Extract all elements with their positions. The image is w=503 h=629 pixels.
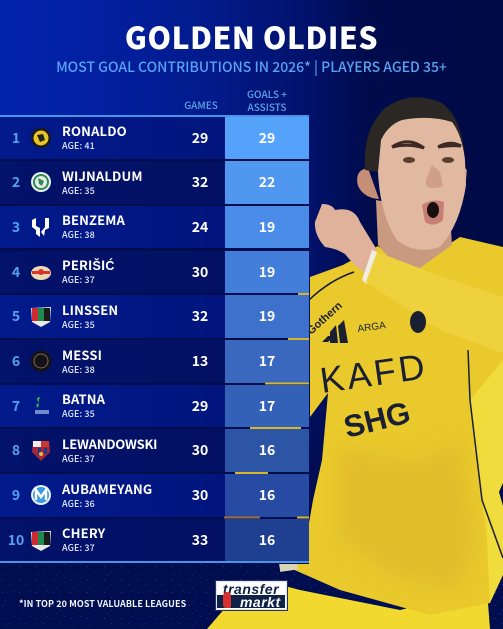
row 6: 13 <box>192 351 208 371</box>
table top rule <box>0 115 309 117</box>
fist and forearm <box>315 204 377 272</box>
row 1: 29 <box>192 128 208 148</box>
row 9: 16 <box>259 485 275 505</box>
row 7: BATNA <box>62 389 105 408</box>
row 4: AGE: 37 <box>62 273 95 286</box>
row 6 <box>0 340 309 382</box>
shoulder stripe <box>309 272 354 300</box>
torso <box>277 237 503 615</box>
logo: Barcelona <box>32 441 50 461</box>
transfermarkt logo <box>216 581 287 610</box>
row 4: 30 <box>192 262 208 282</box>
row 10 <box>0 519 309 561</box>
row 5: LINSSEN <box>62 300 118 319</box>
raised sleeve <box>366 252 503 353</box>
row 1: 29 <box>259 128 275 148</box>
row 8: 16 <box>259 440 275 460</box>
row 2: WIJNALDUM <box>62 166 143 185</box>
shirt shading <box>340 440 475 590</box>
row 3: 3 <box>12 217 20 237</box>
row 7: AGE: 35 <box>62 407 95 420</box>
row 10: 33 <box>192 530 208 550</box>
eyebrows <box>392 142 461 148</box>
column header: goals + assists: GOALS + <box>247 86 287 101</box>
shirt hem tag <box>279 560 298 572</box>
row 10: AGE: 37 <box>62 541 95 554</box>
row 9: AGE: 36 <box>62 497 95 510</box>
sponsor Sothern: Gothern <box>305 300 345 337</box>
row 4: 4 <box>12 262 20 282</box>
table <box>0 115 309 564</box>
logo: Al-Ettifaq <box>31 172 51 192</box>
row 9 <box>0 474 309 517</box>
row 5: AGE: 35 <box>62 318 95 331</box>
crest <box>410 311 426 333</box>
row 8: 30 <box>192 440 208 460</box>
sponsor KAFD: KAFD <box>317 345 430 401</box>
row 5: 5 <box>12 306 20 326</box>
logo: NEC <box>31 531 51 551</box>
row 5: 19 <box>259 306 275 326</box>
logo: PSV <box>31 266 51 280</box>
row 6: AGE: 38 <box>62 362 95 376</box>
logo: Marseille <box>31 485 51 505</box>
logo word: transfer: transfer <box>223 581 279 597</box>
logo: Al-Hilal <box>32 218 49 237</box>
logo word: markt: markt <box>240 594 281 610</box>
ears <box>357 168 379 199</box>
column header: goals + assists <box>247 86 287 114</box>
row 8: LEWANDOWSKI <box>62 434 157 453</box>
row 10: 10 <box>8 530 24 550</box>
right sleeve area <box>440 340 503 603</box>
logo: Batna club <box>35 397 49 414</box>
row 4 <box>0 251 309 293</box>
side seam <box>468 350 503 558</box>
row 2: 22 <box>259 172 275 192</box>
column header: goals + assists: ASSISTS <box>248 99 286 114</box>
row 7: 7 <box>12 396 20 416</box>
row 2: AGE: 35 <box>62 184 95 197</box>
neck <box>376 200 452 268</box>
logo: Al-Nassr <box>31 128 51 148</box>
table bottom rule <box>0 561 309 563</box>
face <box>378 118 466 250</box>
row 5: 32 <box>192 306 208 326</box>
column header: games: GAMES <box>184 97 218 112</box>
title: GOLDEN OLDIES <box>125 14 378 58</box>
sponsor ARGA: ARGA <box>357 320 387 335</box>
logo figure <box>223 592 231 608</box>
row 4: PERIŠIĆ <box>62 255 115 274</box>
row 10: CHERY <box>62 523 105 542</box>
row 6: 6 <box>12 351 20 371</box>
logo: Inter Miami <box>30 350 52 372</box>
nose <box>426 165 443 188</box>
sponsor SHG: SHG <box>340 395 414 445</box>
row 6: 17 <box>259 351 275 371</box>
row 3: 24 <box>192 217 208 237</box>
row 9: 30 <box>192 485 208 505</box>
mouth <box>422 201 444 225</box>
row 3 <box>0 206 309 248</box>
adidas stripes <box>322 320 348 343</box>
row 10: 16 <box>259 530 275 550</box>
row 2: 32 <box>192 172 208 192</box>
row 7 <box>0 385 309 427</box>
row 1 <box>0 116 309 159</box>
row 2 <box>0 161 309 204</box>
row 3: AGE: 38 <box>62 228 95 241</box>
row 1: AGE: 41 <box>62 139 95 152</box>
row 9: AUBAMEYANG <box>62 479 152 498</box>
eyes <box>403 157 415 163</box>
hair <box>365 97 465 172</box>
footnote: *IN TOP 20 MOST VALUABLE LEAGUES <box>19 597 186 610</box>
row 9: 9 <box>12 485 20 505</box>
row 3: BENZEMA <box>62 210 125 229</box>
subtitle: MOST GOAL CONTRIBUTIONS IN 2026* | PLAYERS AGED 35+ <box>56 57 447 77</box>
logo word: markt <box>217 595 285 608</box>
white cuff <box>362 250 377 284</box>
row 8: AGE: 37 <box>62 452 95 465</box>
shorts <box>207 580 490 629</box>
row 5 <box>0 295 309 338</box>
row 7: 29 <box>192 396 208 416</box>
row 8 <box>0 429 309 472</box>
row 6: MESSI <box>62 344 102 364</box>
row 1: RONALDO <box>62 121 127 140</box>
row 3: 19 <box>259 217 275 237</box>
row 4: 19 <box>259 262 275 282</box>
row 1: 1 <box>12 128 20 148</box>
row 2: 2 <box>12 172 20 192</box>
starry floor texture <box>2 564 503 629</box>
logo: NEC <box>31 307 51 327</box>
row 7: 17 <box>259 396 275 416</box>
row 8: 8 <box>12 440 20 460</box>
